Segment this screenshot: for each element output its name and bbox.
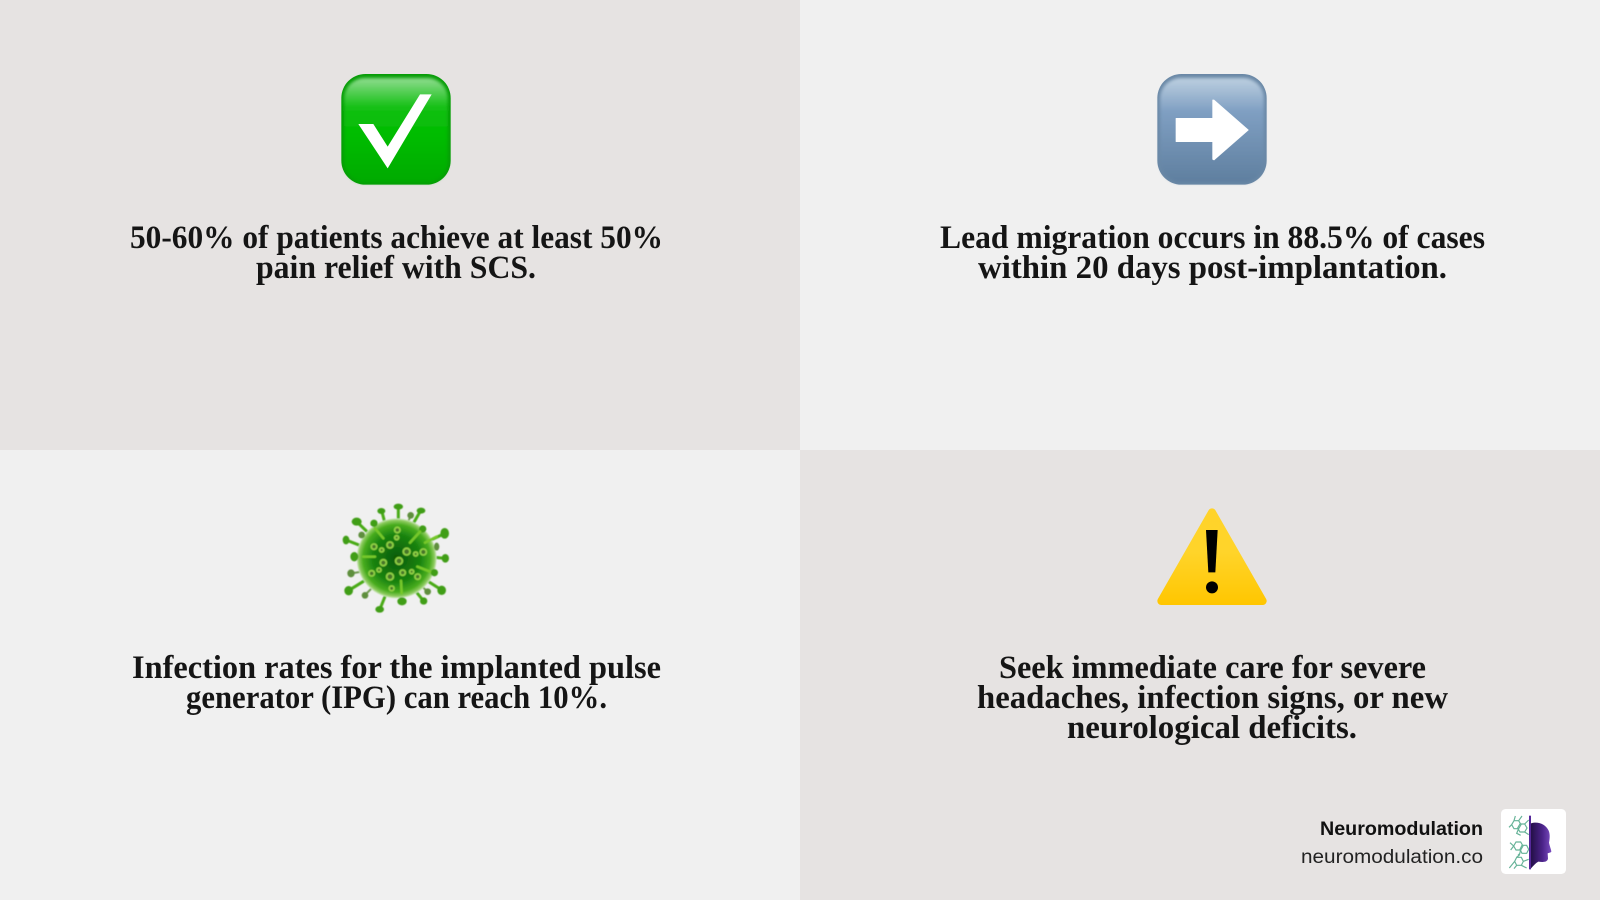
- heading: pain relief statistic: pain relief with SCS.: [256, 250, 536, 286]
- panel: pain relief: [0, 0, 800, 450]
- icon: green check mark: [341, 74, 451, 185]
- heading: lead migration statistic: Lead migration occurs in 88.5% of cases: [940, 220, 1485, 256]
- heading: infection statistic: generator (IPG) can reach 10%.: [186, 680, 607, 716]
- brand name and website: neuromodulation.co: [1301, 847, 1483, 868]
- heading: infection statistic: [132, 650, 661, 716]
- icon: green virus: [343, 504, 449, 613]
- heading: when to seek care: Seek immediate care for severe: [999, 650, 1426, 686]
- heading: lead migration statistic: [940, 220, 1485, 286]
- icon: right arrow button: [1157, 74, 1267, 185]
- heading: pain relief statistic: [130, 220, 663, 286]
- heading: infection statistic: Infection rates for the implanted pulse: [132, 650, 661, 686]
- logo: molecule and head: [1501, 809, 1566, 874]
- brand name and website: Neuromodulation: [1320, 819, 1483, 840]
- brand name and website: [1301, 819, 1483, 868]
- heading: when to seek care: headaches, infection signs, or new: [977, 680, 1448, 716]
- heading: when to seek care: [977, 650, 1448, 746]
- panel: warning signs: [800, 450, 1600, 900]
- panel: lead migration: [800, 0, 1600, 450]
- panel: infection rates: [0, 450, 800, 900]
- icon: warning triangle: [1161, 512, 1263, 601]
- heading: pain relief statistic: 50-60% of patients achieve at least 50%: [130, 220, 663, 256]
- heading: when to seek care: neurological deficits.: [1067, 710, 1357, 746]
- heading: lead migration statistic: within 20 days post-implantation.: [978, 250, 1447, 286]
